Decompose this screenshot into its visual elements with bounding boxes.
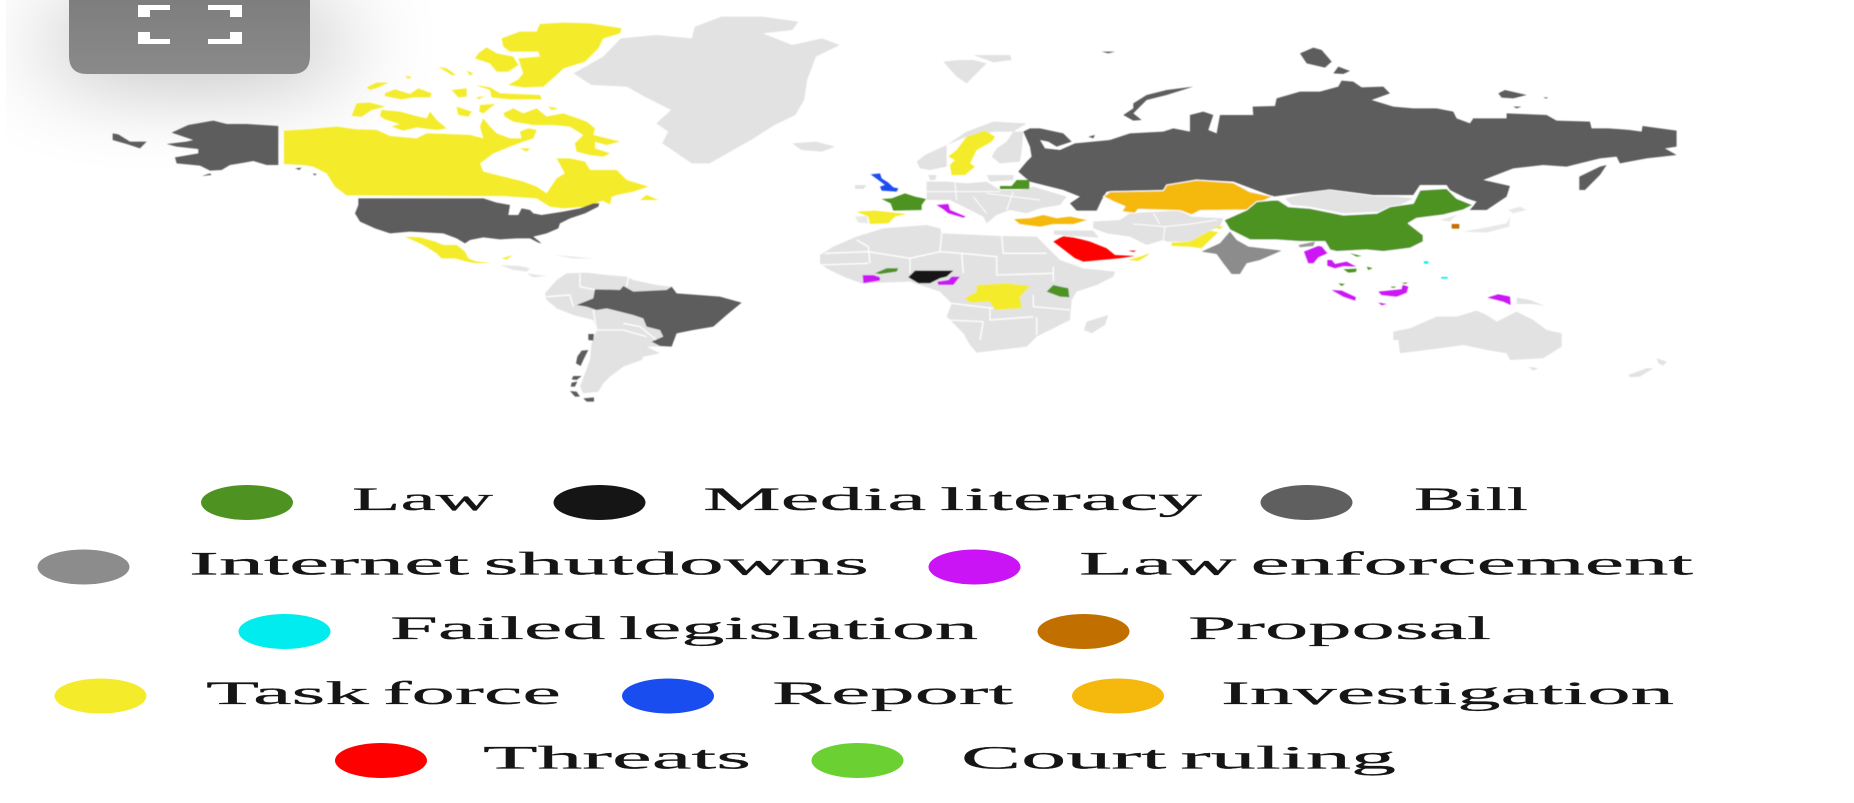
Scandinavia (917, 122, 1027, 182)
India (1202, 232, 1282, 274)
Cameroon (937, 277, 960, 285)
South America (545, 273, 673, 393)
Middle East and Central Asia (1093, 211, 1223, 245)
USA (355, 198, 599, 243)
Pakistan (1172, 227, 1223, 248)
legend row 5: Threats (483, 740, 751, 776)
Belarus (1000, 180, 1029, 189)
UAE (1128, 251, 1137, 252)
Turkey (1014, 215, 1087, 227)
Russian Far East (1300, 48, 1607, 190)
Canada (284, 23, 658, 208)
China (1224, 188, 1473, 252)
Ghana (875, 268, 898, 274)
world map (113, 17, 1677, 402)
legend row 3: Failed legislation (390, 611, 978, 647)
legend row 1: Bill (1414, 482, 1528, 518)
Europe borders (927, 183, 1040, 213)
icon: fullscreen brackets (138, 5, 242, 44)
Nigeria (908, 271, 953, 283)
Failed legislation markers (1424, 261, 1448, 279)
Central and Eastern Europe (927, 182, 1067, 223)
South America borders (547, 273, 657, 340)
legend row 5: Court ruling (961, 740, 1396, 776)
Russia Arctic islands (1088, 52, 1193, 138)
legend row 5 (335, 740, 1396, 778)
Japan and Korea (1440, 207, 1527, 233)
legend row 4: Investigation (1221, 676, 1674, 712)
Mexico (405, 237, 513, 263)
legend row 4: Task force (206, 676, 561, 712)
Proposal marker (1452, 224, 1459, 229)
Sweden (948, 131, 995, 175)
legend row 3: Proposal (1188, 611, 1491, 647)
Europe and West Asia (855, 52, 1677, 333)
Ireland (855, 185, 867, 189)
Spain (857, 211, 907, 224)
legend row 3 (238, 611, 1491, 649)
Central America and Caribbean (500, 255, 593, 277)
Middle East borders (1133, 213, 1217, 240)
Russia (1018, 81, 1677, 211)
legend row 4: Report (772, 676, 1013, 712)
Africa (820, 225, 1115, 353)
Thailand and Indochina (1327, 260, 1356, 268)
Australia and Oceania (1393, 298, 1667, 377)
Brazil (577, 286, 742, 347)
legend row 4 (54, 676, 1674, 714)
Saudi Arabia (1053, 236, 1135, 262)
Oman (1128, 253, 1150, 261)
Portugal (855, 216, 868, 223)
Americas south of Canada (355, 198, 742, 402)
Svalbard and Arctic (943, 55, 1012, 83)
legend row 2: Internet shutdowns (189, 547, 869, 583)
legend (38, 482, 1693, 778)
Italy (937, 204, 966, 218)
button shadow (60, 0, 330, 95)
Madagascar (1084, 315, 1108, 333)
Kenya (1047, 285, 1069, 297)
legend row 2: Law enforcement (1079, 547, 1693, 583)
UK (871, 173, 898, 192)
West Africa magenta (863, 275, 880, 283)
legend row 1: Media literacy (703, 482, 1203, 518)
Alaska (113, 121, 317, 176)
Myanmar (1304, 246, 1327, 263)
Southeast Asia green (1338, 253, 1408, 288)
East Asia and Oceania (1224, 48, 1667, 377)
DR Congo (965, 283, 1030, 310)
legend row 1: Law (352, 482, 493, 518)
Greenland and Iceland (574, 17, 840, 163)
legend row 2 (38, 547, 1693, 584)
Indonesia (1332, 285, 1511, 305)
legend row 1 (201, 482, 1528, 520)
Iraq and Syria (1053, 230, 1100, 238)
Africa borders (820, 233, 1070, 340)
France (882, 193, 926, 211)
Kazakhstan (1103, 180, 1273, 215)
Chile (570, 334, 594, 402)
Mongolia (1285, 190, 1413, 213)
Nepal area (1298, 242, 1315, 247)
fullscreen button (69, 0, 310, 74)
